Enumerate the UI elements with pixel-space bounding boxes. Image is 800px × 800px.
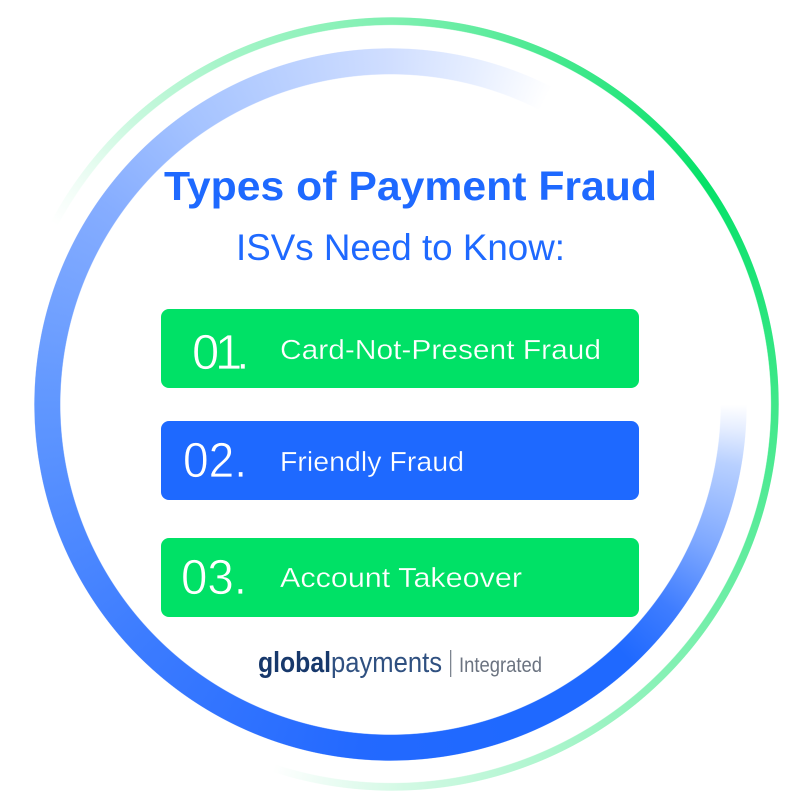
number 03: 03. [181,551,247,605]
title: Types of Payment Fraud [164,163,657,209]
logo: global payments Integrated [258,647,542,679]
number 01: 1 [215,326,242,380]
panel: item 01 Card-Not-Present Fraud [161,309,639,388]
label: Account Takeover: Account Takeover [280,562,522,593]
panel: item 03 Account Takeover [161,538,639,617]
number 02: 02. [183,434,247,488]
panel: item 02 Friendly Fraud [161,421,639,500]
label: Friendly Fraud: Friendly Fraud [280,446,464,477]
label: Card-Not-Present Fraud: Card-Not-Present Fraud [280,334,601,365]
number 01: . [236,326,250,380]
blue inner ring [34,48,746,761]
subtitle: ISVs Need to Know: [236,227,565,268]
number 01: 0 [192,326,219,380]
logo: global payments Integrated: payments [331,647,442,679]
logo: global payments Integrated: Integrated [459,654,542,677]
logo: global payments Integrated: global [258,647,331,679]
